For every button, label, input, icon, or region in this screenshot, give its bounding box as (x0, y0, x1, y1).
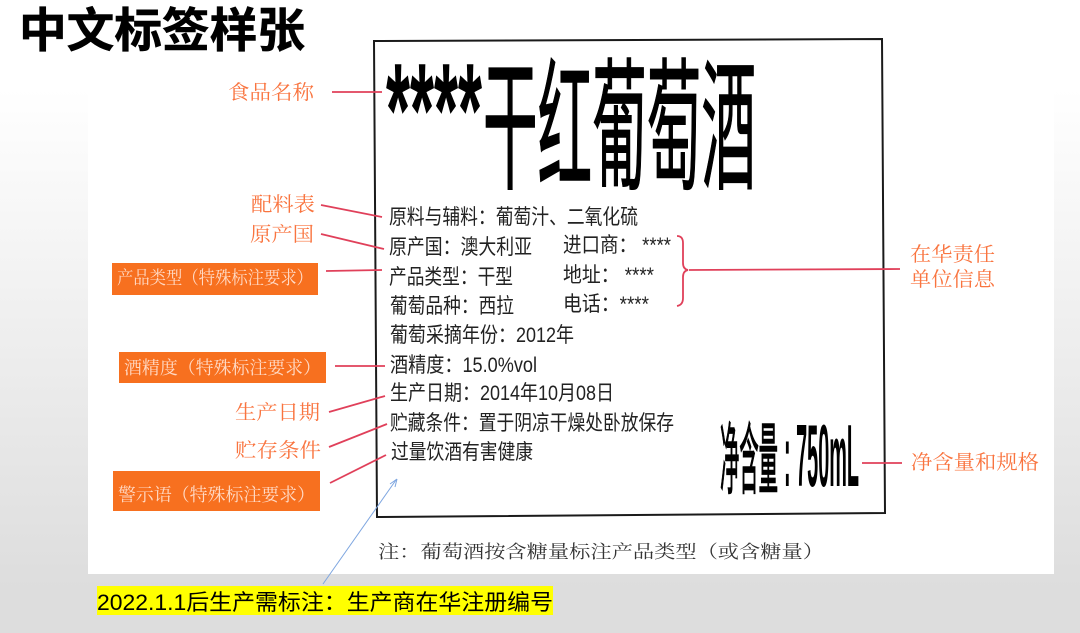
product name (386, 37, 756, 208)
annotation: storage conditions: 贮存条件 (235, 434, 321, 463)
annotation: alcohol content (119, 352, 385, 383)
label details: 过量饮酒有害健康 (391, 441, 533, 464)
product name: 干红葡萄酒 (483, 49, 756, 208)
product name: **** (386, 37, 482, 185)
label details: 贮藏条件：置于阴凉干燥处卧放保存 (390, 412, 674, 435)
label details: 产品类型：干型 (389, 266, 513, 289)
annotation: warning statement (113, 455, 386, 511)
label border (374, 39, 885, 517)
importer details: 电话：**** (563, 293, 649, 316)
net content: : 750mL (784, 405, 859, 505)
annotation: product type: 产品类型（特殊标注要求） (117, 264, 313, 290)
annotation: alcohol content: 酒精度（特殊标注要求） (124, 354, 321, 380)
annotation: net content: 净含量和规格 (911, 446, 1039, 475)
label details: 酒精度：15.0%vol (390, 354, 537, 377)
importer details: 进口商： **** (563, 234, 671, 257)
footnote: 注：葡萄酒按含糖量标注产品类型（或含糖量） (378, 538, 824, 564)
net content: 净含量 (720, 417, 778, 505)
title: 中文标签样张 (19, 4, 305, 57)
label details (389, 206, 674, 464)
annotation: ingredients: 配料表 (251, 188, 315, 217)
label details: 生产日期：2014年10月08日 (390, 382, 614, 405)
annotation: product type (112, 263, 382, 295)
highlighted note: 2022.1.1后生产需标注：生产商在华注册编号 (97, 590, 553, 615)
annotation: responsible party bracket: 在华责任 (910, 238, 995, 267)
label details: 葡萄品种：西拉 (390, 295, 514, 318)
label details: 原料与辅料：葡萄汁、二氧化硫 (389, 206, 638, 229)
annotation: country of origin: 原产国 (250, 218, 314, 247)
label details: 葡萄采摘年份：2012年 (390, 324, 574, 347)
arrow: note to label (323, 479, 397, 584)
annotation: responsible party bracket: 单位信息 (910, 263, 996, 292)
net content (720, 405, 859, 505)
annotation: storage conditions (235, 424, 387, 463)
annotation: responsible party bracket (677, 236, 996, 306)
annotation: ingredients (251, 188, 382, 217)
annotation: production date: 生产日期 (235, 396, 320, 425)
panel: label sample (374, 37, 885, 517)
annotation: country of origin (250, 218, 384, 249)
importer details (563, 234, 671, 316)
importer details: 地址： **** (563, 264, 654, 287)
annotation: food name: 食品名称 (228, 76, 315, 105)
label details: 原产国：澳大利亚 (389, 236, 532, 259)
annotation: warning statement: 警示语（特殊标注要求） (118, 481, 315, 507)
annotation: production date (235, 396, 385, 425)
label image panel (88, 40, 1054, 574)
